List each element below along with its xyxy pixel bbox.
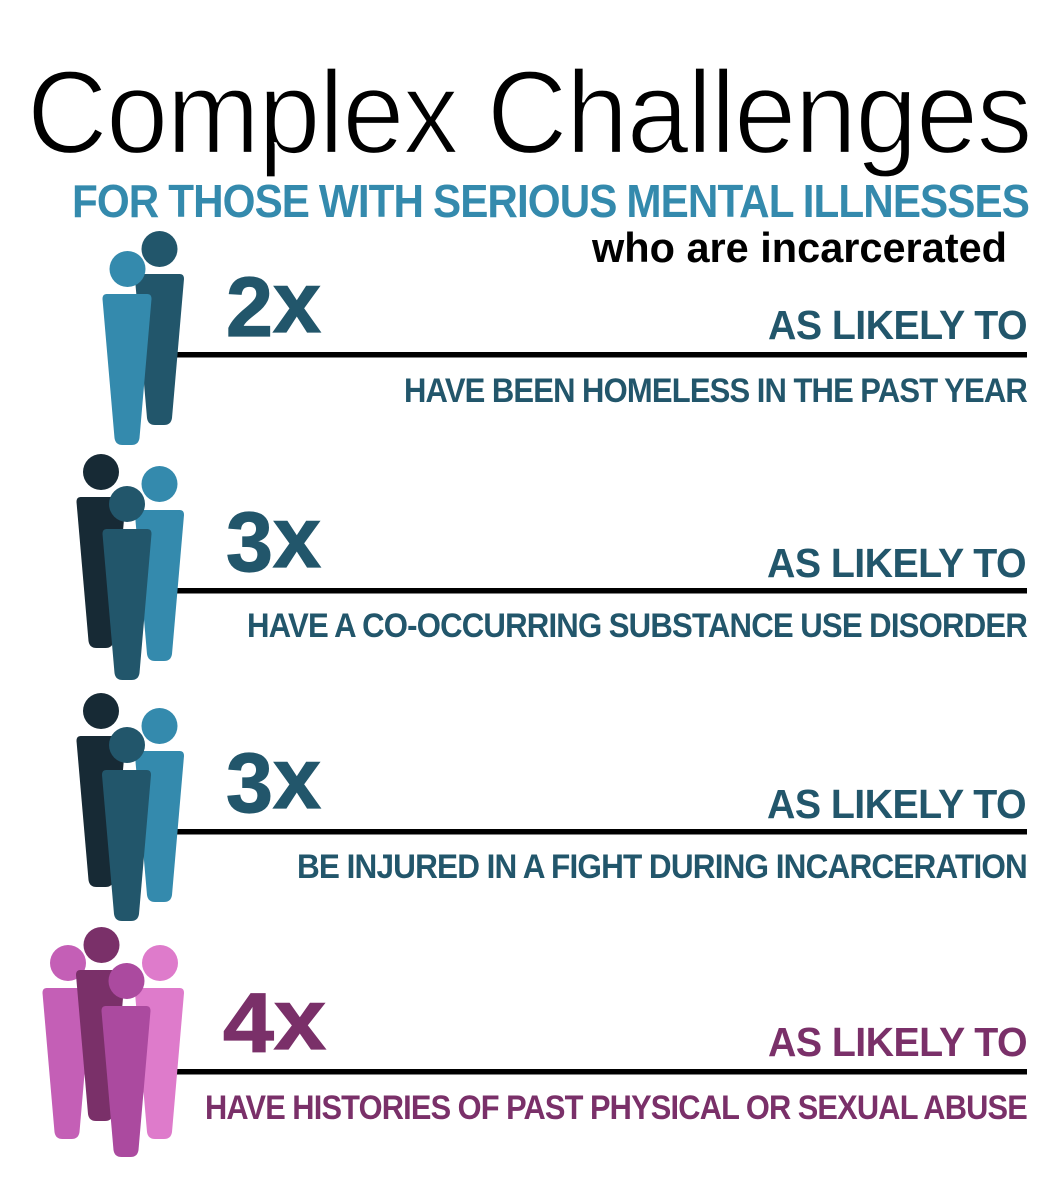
as likely to: AS LIKELY TO — [768, 302, 1027, 348]
as likely to: AS LIKELY TO — [767, 781, 1026, 827]
multiplier 3x: x — [273, 731, 321, 827]
icon: three people — [76, 693, 184, 921]
multiplier 3x: x — [273, 490, 321, 586]
divider line — [176, 829, 1027, 834]
icon: three people — [76, 454, 184, 680]
divider line — [176, 352, 1027, 358]
subtitle line two: who are incarcerated — [591, 224, 1007, 271]
icon: two people — [102, 231, 184, 445]
multiplier 4x: 4 — [223, 976, 274, 1070]
as likely to: AS LIKELY TO — [768, 1019, 1027, 1065]
row 4: abuse — [42, 927, 1027, 1157]
as likely to: AS LIKELY TO — [767, 540, 1026, 586]
icon: four people — [42, 927, 184, 1157]
multiplier 3x: 3 — [226, 736, 273, 830]
multiplier 2x: x — [273, 255, 321, 351]
multiplier 4x: x — [274, 972, 326, 1068]
row 2: substance use — [76, 454, 1028, 680]
multiplier 2x: 2 — [226, 260, 273, 354]
divider line — [176, 588, 1027, 594]
row 3: injured — [76, 693, 1027, 921]
divider line — [176, 1069, 1027, 1074]
row 1: homeless — [102, 231, 1028, 445]
multiplier 3x: 3 — [226, 495, 273, 589]
